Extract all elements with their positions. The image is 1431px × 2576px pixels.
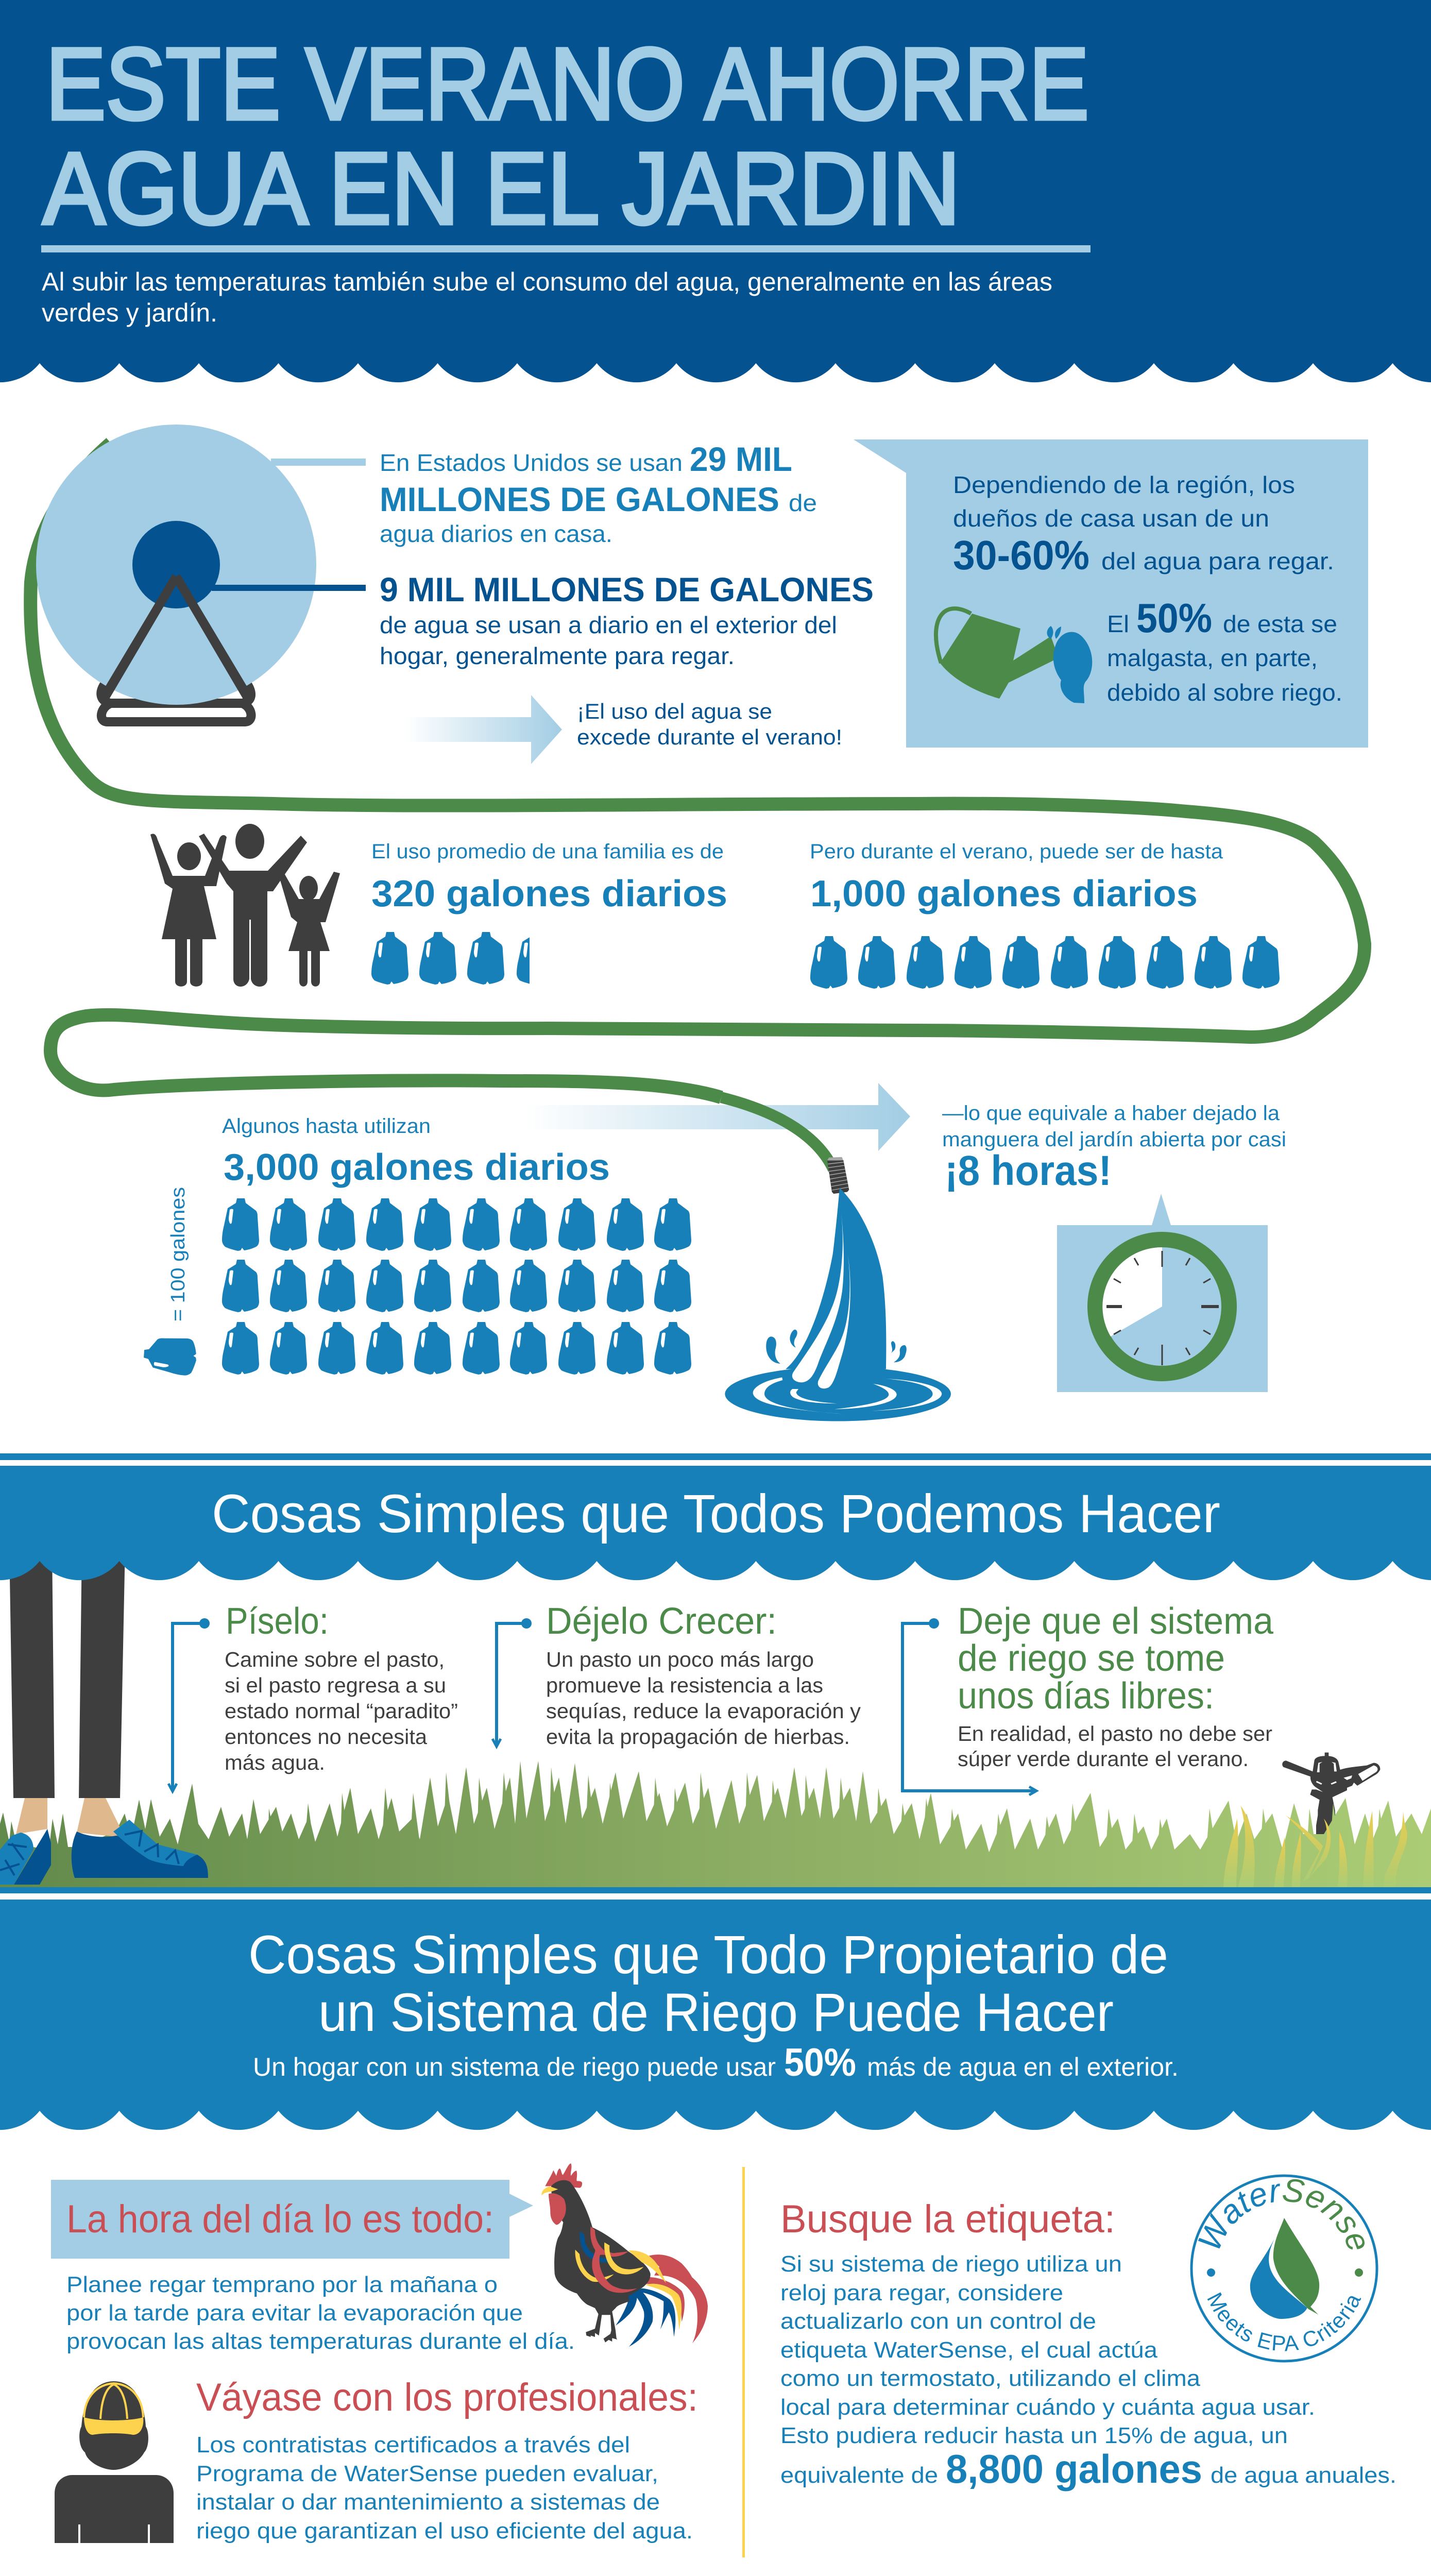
hose end xyxy=(721,1097,833,1170)
text: professionals: Váyase con los profesionales: xyxy=(196,2376,698,2419)
bottles row xyxy=(371,932,530,985)
connector lines xyxy=(212,459,366,591)
panel text xyxy=(953,471,1342,706)
icon: contractor xyxy=(55,2381,174,2543)
text: 29 mil millones xyxy=(380,440,817,547)
panel: time of day: La hora del día lo es todo: xyxy=(66,2197,494,2241)
title xyxy=(41,27,1091,252)
panel: time of day: por la tarde para evitar la evaporación que xyxy=(66,2300,523,2326)
tip: days off: de riego se tome xyxy=(958,1638,1225,1679)
bottles grid xyxy=(222,1198,691,1375)
text: 29 mil millones: En Estados Unidos se usan xyxy=(380,449,683,476)
text: look for the label: equivalente de xyxy=(780,2463,938,2488)
text: eight hours: ¡8 horas! xyxy=(945,1147,1112,1194)
panel text: 30-60% xyxy=(953,532,1089,578)
left shoe xyxy=(14,1829,51,1885)
heading: system owners xyxy=(248,1925,1179,2084)
text: 29 mil millones: de xyxy=(789,489,817,516)
text: look for the label: Busque la etiqueta: xyxy=(780,2197,1115,2241)
text: eight hours xyxy=(942,1102,1286,1194)
text: exceeds in summer: ¡El uso del agua se xyxy=(577,699,772,723)
icon: WaterSense logo xyxy=(1190,2174,1378,2363)
text: look for the label: local para determinar cuándo y cuánta agua usar. xyxy=(780,2395,1315,2420)
garden hose xyxy=(30,443,1365,1097)
vertical divider xyxy=(742,2167,745,2557)
stat: 1000 gallons xyxy=(810,840,1280,989)
text: look for the label: reloj para regar, considere xyxy=(780,2280,1063,2306)
text: 29 mil millones: MILLONES DE GALONES xyxy=(380,480,779,518)
text: look for the label: Esto pudiera reducir hasta un 15% de agua, un xyxy=(780,2423,1288,2448)
panel text: del agua para regar. xyxy=(1101,548,1334,574)
band: simple things xyxy=(0,1466,1431,1580)
tip: let it grow: promueve la resistencia a las xyxy=(546,1673,823,1697)
panel: region xyxy=(854,439,1368,748)
header banner xyxy=(0,0,1431,382)
stat: 3000 gallons xyxy=(222,1115,691,1375)
text: professionals: Los contratistas certificados a través del xyxy=(196,2432,630,2458)
panel: time of day: Planee regar temprano por la mañana o xyxy=(66,2272,498,2297)
stat: 3000 gallons: 3,000 galones diarios xyxy=(224,1147,610,1188)
stat: 3000 gallons: Algunos hasta utilizan xyxy=(222,1115,431,1138)
tip: let it grow: sequías, reduce la evaporación y xyxy=(546,1699,861,1723)
icon: rooster xyxy=(541,2163,708,2347)
text: professionals: Programa de WaterSense pueden evaluar, xyxy=(196,2461,658,2486)
panel text: 50% xyxy=(1136,595,1212,641)
panel: time of day xyxy=(51,2180,575,2354)
tip: days off: En realidad, el pasto no debe ser xyxy=(958,1722,1272,1745)
stat: 1000 gallons: Pero durante el verano, puede ser de hasta xyxy=(810,840,1223,863)
text: look for the label: 8,800 galones xyxy=(946,2446,1202,2492)
panel: time of day: provocan las altas temperaturas durante el día. xyxy=(66,2329,575,2354)
heading: simple things: Cosas Simples que Todos Podemos Hacer xyxy=(212,1484,1220,1544)
text: professionals xyxy=(196,2376,698,2544)
icon: family xyxy=(150,824,340,987)
tip: let it grow: evita la propagación de hierbas. xyxy=(546,1725,850,1749)
bottles row xyxy=(810,936,1280,989)
tip: days off: Deje que el sistema xyxy=(958,1601,1274,1642)
text: look for the label: como un termostato, utilizando el clima xyxy=(780,2366,1201,2391)
grass band xyxy=(0,1761,1431,1887)
text: 9 mil millones xyxy=(380,570,874,669)
text: look for the label: actualizarlo con un control de xyxy=(780,2309,1096,2334)
legs and shoes xyxy=(9,1546,125,1798)
stat: 1000 gallons: 1,000 galones diarios xyxy=(810,873,1198,914)
tip: pise: Píselo: xyxy=(226,1601,329,1642)
stat: 320 gallons: El uso promedio de una familia es de xyxy=(371,840,724,863)
panel text: debido al sobre riego. xyxy=(1107,679,1342,706)
icon: hose nozzle and water xyxy=(725,1157,951,1421)
heading: system owners: Cosas Simples que Todo Propietario de xyxy=(248,1925,1168,1985)
text: eight hours: —lo que equivale a haber dejado la xyxy=(942,1102,1280,1125)
hose reel xyxy=(36,425,316,722)
text: look for the label: de agua anuales. xyxy=(1211,2463,1396,2488)
text: 9 mil millones: de agua se usan a diario en el exterior del xyxy=(380,612,837,638)
heading: system owners: 50% xyxy=(784,2041,856,2084)
text: look for the label: etiqueta WaterSense, el cual actúa xyxy=(780,2337,1158,2363)
feet xyxy=(0,1798,208,1885)
text: 29 mil millones: agua diarios en casa. xyxy=(380,520,612,547)
text: 9 mil millones: hogar, generalmente para regar. xyxy=(380,642,735,669)
title: AGUA EN EL JARDIN xyxy=(43,131,960,245)
text: professionals: riego que garantizan el uso eficiente del agua. xyxy=(196,2518,693,2544)
text: professionals: instalar o dar mantenimiento a sistemas de xyxy=(196,2489,660,2515)
stat: 320 gallons xyxy=(371,840,727,985)
icon: impact sprinkler xyxy=(1282,1753,1380,1855)
title: ESTE VERANO AHORRE xyxy=(46,27,1089,141)
divider stripe xyxy=(0,1453,1431,1460)
stat: 320 gallons: 320 galones diarios xyxy=(371,873,727,914)
legend: 100 gallons xyxy=(143,1187,198,1376)
text: exceeds in summer xyxy=(577,699,842,749)
panel text: de esta se xyxy=(1223,611,1337,637)
icon: WaterSense logo: WaterSense xyxy=(1198,2179,1365,2249)
tip: pise: Camine sobre el pasto, xyxy=(225,1648,445,1671)
band: system owners xyxy=(0,1900,1431,2130)
panel text: Dependiendo de la región, los xyxy=(953,471,1295,498)
big arrow xyxy=(525,1083,910,1151)
panel text: malgasta, en parte, xyxy=(1107,645,1318,671)
tip: pise xyxy=(225,1601,458,1774)
tip: pise: más agua. xyxy=(225,1751,325,1774)
heading: system owners: más de agua en el exterior. xyxy=(867,2053,1179,2081)
panel text: dueños de casa usan de un xyxy=(953,505,1269,532)
intro text xyxy=(42,267,1052,327)
tip: days off: unos días libres: xyxy=(958,1675,1214,1717)
icon: watering can xyxy=(936,608,1092,703)
divider stripe xyxy=(0,1887,1431,1893)
panel text: El xyxy=(1107,611,1129,637)
heading: system owners: Un hogar con un sistema de riego puede usar xyxy=(253,2053,776,2081)
icon: WaterSense logo: Meets EPA Criteria xyxy=(1207,2292,1361,2351)
tip: let it grow xyxy=(546,1601,861,1749)
right shoe xyxy=(72,1832,208,1878)
text: look for the label xyxy=(780,2197,1396,2492)
text: 9 mil millones: 9 MIL MILLONES DE GALONES xyxy=(380,570,874,608)
legend: 100 gallons: = 100 galones xyxy=(167,1187,189,1321)
text: eight hours: manguera del jardín abierta por casi xyxy=(942,1128,1286,1151)
tip: pise: estado normal “paradito” xyxy=(225,1699,458,1723)
connector arrows xyxy=(168,1618,1036,1795)
intro text: Al subir las temperaturas también sube el consumo del agua, generalmente en las áreas xyxy=(42,267,1052,296)
icon: clock panel xyxy=(1057,1194,1268,1392)
tip: pise: si el pasto regresa a su xyxy=(225,1673,446,1697)
tip: let it grow: Un pasto un poco más largo xyxy=(546,1648,814,1671)
tip: pise: entonces no necesita xyxy=(225,1725,427,1749)
tip: days off xyxy=(958,1601,1274,1771)
intro text: verdes y jardín. xyxy=(42,298,217,327)
arrow xyxy=(406,695,562,764)
text: look for the label: Si su sistema de riego utiliza un xyxy=(780,2251,1122,2277)
text: exceeds in summer: excede durante el verano! xyxy=(577,725,842,749)
heading: system owners: un Sistema de Riego Puede Hacer xyxy=(318,1982,1114,2043)
tip: days off: súper verde durante el verano. xyxy=(958,1747,1249,1771)
tip: let it grow: Déjelo Crecer: xyxy=(546,1601,777,1642)
text: 29 mil millones: 29 MIL xyxy=(690,440,792,478)
